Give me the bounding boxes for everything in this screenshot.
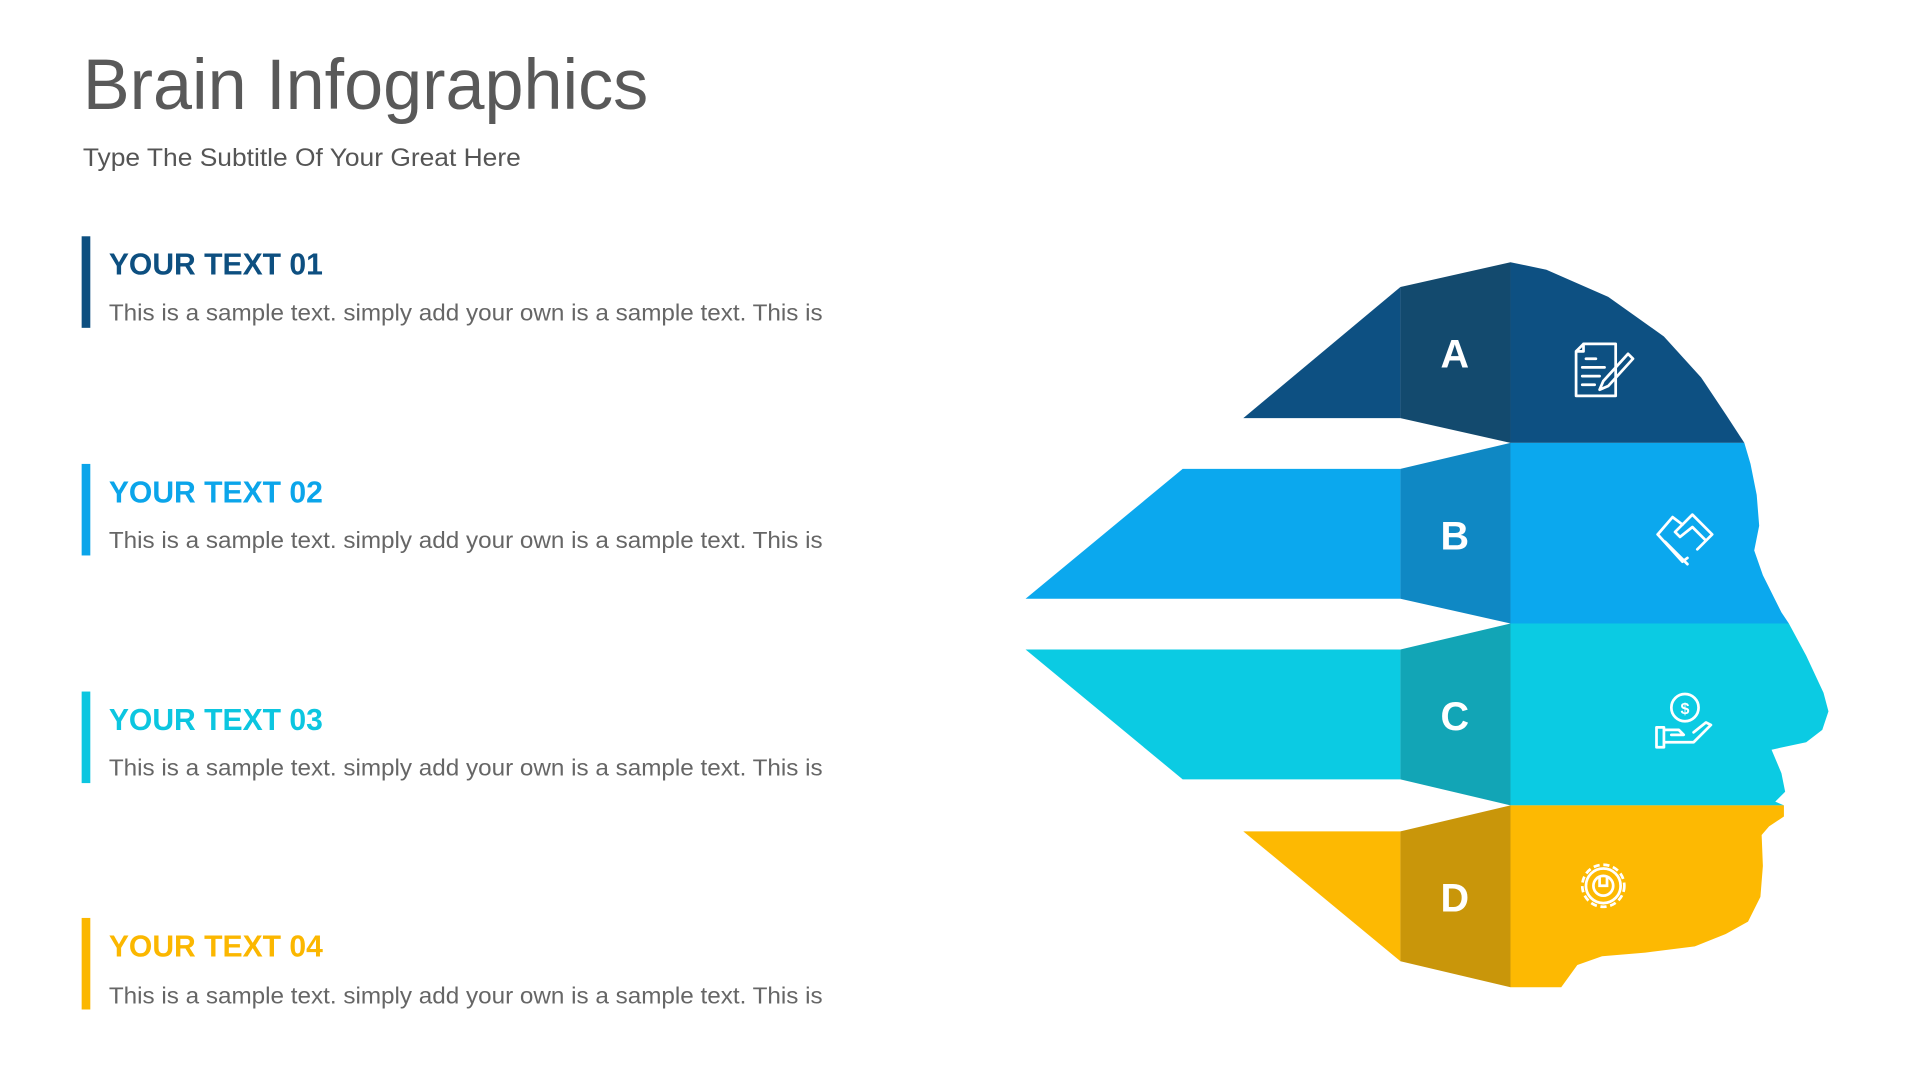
- text item 04: [82, 918, 823, 1009]
- text item 02: This is a sample text. simply add your own is a sample text. This is: [109, 527, 823, 553]
- band A: A: [1441, 332, 1469, 376]
- text item 03: YOUR TEXT 03: [109, 702, 323, 737]
- band B: B: [1441, 514, 1469, 558]
- band D: D: [1441, 877, 1469, 921]
- icon: hand with coin: [1656, 694, 1711, 747]
- band C: C: [1441, 695, 1469, 739]
- icon: gear with wrench: [1582, 865, 1624, 907]
- text item 04: YOUR TEXT 04: [109, 928, 324, 963]
- icon: hand with coin: $: [1680, 700, 1689, 718]
- text item 01: This is a sample text. simply add your own is a sample text. This is: [109, 299, 823, 325]
- text item 02: [82, 464, 823, 555]
- title: Brain Infographics: [83, 45, 648, 125]
- band B: [1026, 443, 1789, 624]
- text item 04: This is a sample text. simply add your own is a sample text. This is: [109, 982, 823, 1008]
- text item 03: [82, 692, 823, 783]
- band C: [1026, 624, 1828, 805]
- subtitle: Type The Subtitle Of Your Great Here: [83, 145, 521, 172]
- band A: [1243, 262, 1744, 443]
- text item 01: YOUR TEXT 01: [109, 247, 323, 282]
- icon: handshake: [1658, 515, 1712, 564]
- text item 03: This is a sample text. simply add your own is a sample text. This is: [109, 755, 823, 781]
- head diagram: [1026, 262, 1828, 987]
- icon: document with pen: [1576, 344, 1633, 396]
- band D: [1243, 805, 1784, 987]
- text item 01: [82, 236, 823, 328]
- text item 02: YOUR TEXT 02: [109, 474, 323, 509]
